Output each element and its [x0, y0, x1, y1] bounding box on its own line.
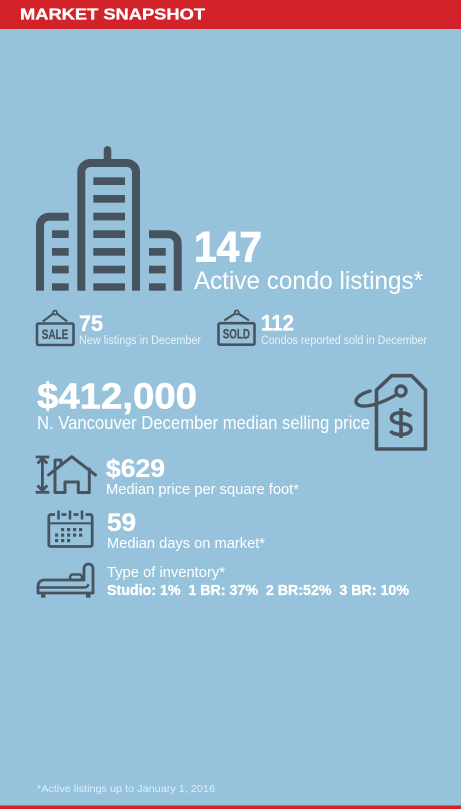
icon: sale sign [37, 311, 74, 345]
new listings number: 75 [79, 311, 103, 336]
icon: sold sign [218, 310, 254, 345]
sold label: Condos reported sold in December [261, 335, 427, 347]
days on market label: Median days on market* [107, 535, 265, 552]
active listings label: Active condo listings* [194, 267, 423, 295]
active listings number: 147 [194, 224, 262, 272]
icon: calendar [49, 510, 92, 546]
sold number: 112 [261, 310, 294, 336]
inventory breakdown: Studio: 1% 1 BR: 37% 2 BR:52% 3 BR: 10% [107, 583, 409, 599]
icon: sale sign: SALE [42, 326, 68, 342]
price per square foot label: Median price per square foot* [106, 481, 299, 498]
icon: sold sign: SOLD [223, 325, 250, 341]
new listings label: New listings in December [79, 335, 201, 347]
median selling price number: $412,000 [37, 376, 197, 416]
header bar [0, 0, 461, 29]
icon: buildings [40, 146, 178, 291]
footnote: *Active listings up to January 1, 2016 [37, 784, 215, 795]
inventory label: Type of inventory* [107, 564, 225, 581]
median selling price label: N. Vancouver December median selling price [37, 413, 370, 433]
icon: house with height arrow [36, 457, 96, 492]
icon: bed [38, 564, 93, 598]
price per square foot number: $629 [106, 455, 165, 483]
footer bar [0, 806, 461, 809]
title: MARKET SNAPSHOT [20, 6, 206, 24]
icon: price tag [356, 376, 426, 449]
days on market number: 59 [107, 509, 136, 537]
